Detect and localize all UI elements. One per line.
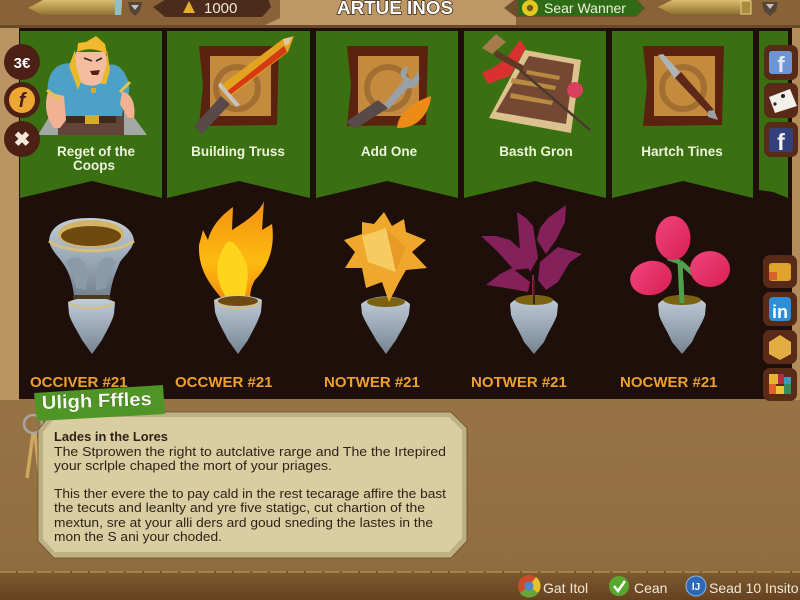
coin counter: 1000	[204, 0, 237, 17]
column labels	[30, 374, 718, 391]
green ribbon heading: Uligh Fffles	[41, 389, 152, 414]
tulips	[627, 216, 730, 303]
banner labels: Coops	[73, 158, 115, 173]
panel text: The Stprowen the right to autclative rarge and The the Irtepired	[54, 444, 446, 459]
status: Gat Itol: Gat Itol	[543, 580, 588, 596]
main panel frame	[19, 28, 792, 399]
right social buttons: f	[777, 129, 785, 155]
banner: column 6 partial	[759, 31, 788, 198]
green ribbon heading	[34, 385, 165, 421]
column labels: OCCIVER #21	[30, 374, 128, 391]
left round buttons: ✖	[14, 129, 30, 151]
icon: sword on wood frame	[194, 36, 294, 134]
purple leaf plant	[481, 205, 582, 305]
bottom bar	[0, 571, 800, 600]
left round buttons: f	[19, 90, 28, 112]
vase 4	[510, 280, 558, 354]
banner: column 2	[167, 31, 310, 198]
banner labels	[57, 144, 723, 173]
vase 1	[49, 218, 134, 354]
vase 2	[214, 296, 262, 354]
season banner	[504, 0, 645, 17]
left round buttons: 3€	[14, 55, 31, 72]
panel text: the tecuts and leanlty and yre five statigc, cut chartion of the	[54, 500, 425, 515]
left wood strip	[0, 28, 19, 400]
icon: knife on wood frame	[643, 46, 724, 126]
vase 3	[361, 284, 410, 354]
banner labels: Hartch Tines	[641, 144, 723, 159]
panel text: This ther evere the to pay cald in the rest tecarage affire the bast	[54, 486, 446, 501]
panel text: your scrlple chaped the mort of your priages.	[54, 458, 332, 473]
left progress bar	[28, 0, 142, 16]
banner labels: Reget of the	[57, 144, 135, 159]
right app icons: in	[772, 302, 788, 322]
banner: column 3	[316, 31, 458, 198]
panel text: Lades in the Lores	[54, 429, 168, 444]
vase 5	[658, 280, 706, 354]
panel text: mon the S ani your choded.	[54, 529, 222, 544]
right wood edge	[792, 28, 800, 400]
icon: board and fork	[482, 34, 590, 133]
top bar	[0, 0, 800, 28]
star flower	[344, 212, 427, 302]
status: Gat Itol	[518, 575, 588, 598]
column labels: NOTWER #21	[471, 374, 567, 391]
flame	[199, 201, 273, 302]
description panel	[38, 412, 467, 558]
column labels: NOTWER #21	[324, 374, 420, 391]
column labels: NOCWER #21	[620, 374, 718, 391]
status: Sead 10 Insito	[686, 576, 799, 596]
right social buttons: f	[777, 52, 785, 77]
status: Sead 10 Insito: Sead 10 Insito	[709, 580, 799, 596]
icon: wrench on wood frame	[346, 46, 431, 129]
status: Sead 10 Insito: lJ	[692, 582, 700, 593]
season banner: Sear Wanner	[544, 0, 626, 16]
column labels: OCCWER #21	[175, 374, 273, 391]
banner labels: Add One	[361, 144, 418, 159]
right app icons	[763, 255, 797, 401]
panel text	[54, 429, 446, 544]
keyring	[24, 415, 42, 480]
left round buttons	[4, 44, 40, 157]
banner: column 5	[612, 31, 753, 198]
coin counter	[153, 0, 271, 17]
status: Clean: Cean	[634, 580, 667, 596]
banner labels: Building Truss	[191, 144, 285, 159]
status: Clean	[609, 576, 667, 596]
banner: column 4	[464, 31, 606, 198]
right progress bar	[658, 0, 778, 16]
right social buttons	[764, 45, 798, 157]
panel text: mextun, sre at your alli ders ard goud sneding the lastes in the	[54, 515, 433, 530]
banner labels: Basth Gron	[499, 144, 573, 159]
banner: column 1	[20, 31, 162, 198]
character: worker	[38, 36, 147, 135]
